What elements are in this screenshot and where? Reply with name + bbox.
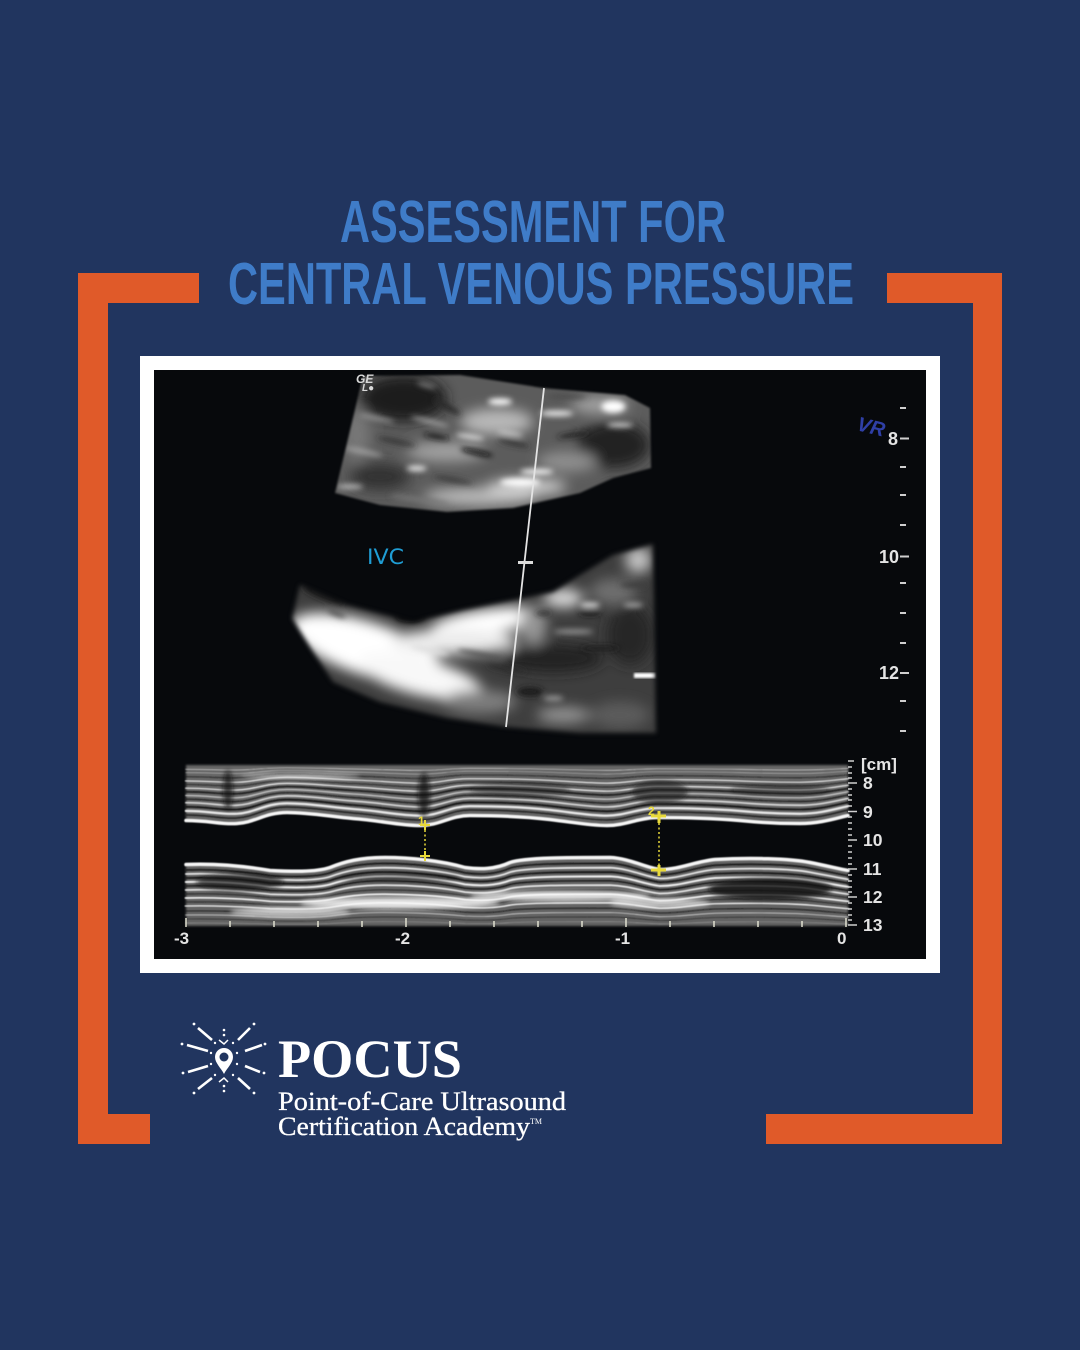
logo icon: location pin with rays [181,1023,266,1094]
black image background [154,370,926,959]
time axis: -1 [615,929,630,948]
depth scale: 2D view: 12 [879,663,899,683]
M-mode: upper wall band [186,765,848,826]
logo wordmark: Point-of-Care Ultrasound [278,1087,566,1116]
label: GE marker: GE [356,372,374,386]
title: ASSESSMENT FOR [340,189,726,255]
label: VR: VR [855,414,888,442]
depth scale: M-mode: 8 [863,773,873,793]
ultrasound image panel [140,356,940,973]
2D ultrasound sector: lower tissue [282,540,660,740]
depth scale: M-mode: 9 [863,802,873,822]
depth scale: 2D view: 10 [879,547,899,567]
logo wordmark [278,1029,566,1141]
depth scale: M-mode: 11 [863,859,882,879]
depth scale: M-mode: 12 [863,887,883,907]
M-mode trace [186,765,848,926]
title [228,189,854,317]
depth scale: M-mode [848,755,897,935]
M-mode trace: 1 [418,814,425,828]
depth scale: 2D view: 8 [888,429,898,449]
logo wordmark: TM [530,1117,542,1126]
logo wordmark: POCUS [278,1029,462,1089]
M-mode: lower wall band [186,857,848,926]
label: GE marker: L● [362,383,374,394]
logo wordmark: Certification Academy [278,1112,530,1141]
M-mode trace: 2 [648,804,655,818]
depth scale: M-mode: [cm] [861,755,897,774]
time axis: -3 [174,929,189,948]
M-mode: dark and bright patches in upper band [223,770,830,817]
logo [181,1023,566,1141]
2D ultrasound sector: upper tissue [330,370,660,515]
depth scale: M-mode: 13 [863,915,883,935]
yellow calipers [420,811,666,876]
M-mode: dark and bright patches in lower band [196,873,832,917]
right orange bracket [766,273,1002,1144]
time axis [174,918,846,948]
time axis: -2 [395,929,410,948]
depth scale: 2D view [879,408,909,731]
left orange bracket [78,273,199,1144]
label: IVC: IVC [367,545,404,569]
M-mode cursor line [506,388,544,727]
white frame [140,356,940,973]
depth scale: M-mode: 10 [863,830,883,850]
time axis: 0 [837,929,846,948]
label: GE marker [356,372,374,394]
